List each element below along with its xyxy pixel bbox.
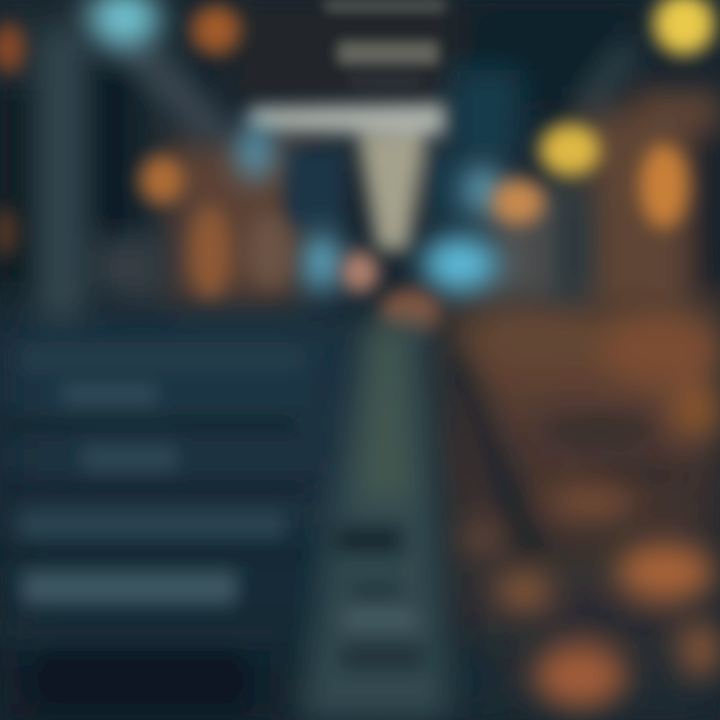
warm lights	[0, 0, 714, 334]
left pillar and diagonal beams	[40, 0, 640, 320]
central walkway	[300, 320, 450, 720]
floor: left dark teal area and right brown area	[0, 300, 720, 720]
left floor rows	[0, 348, 310, 705]
blue lights	[91, 0, 502, 292]
ceiling stripes	[325, 0, 445, 85]
right floor shapes	[440, 314, 720, 718]
walkway dark and light steps	[335, 528, 425, 669]
upper walls	[0, 0, 720, 310]
central hourglass shape	[250, 104, 465, 250]
